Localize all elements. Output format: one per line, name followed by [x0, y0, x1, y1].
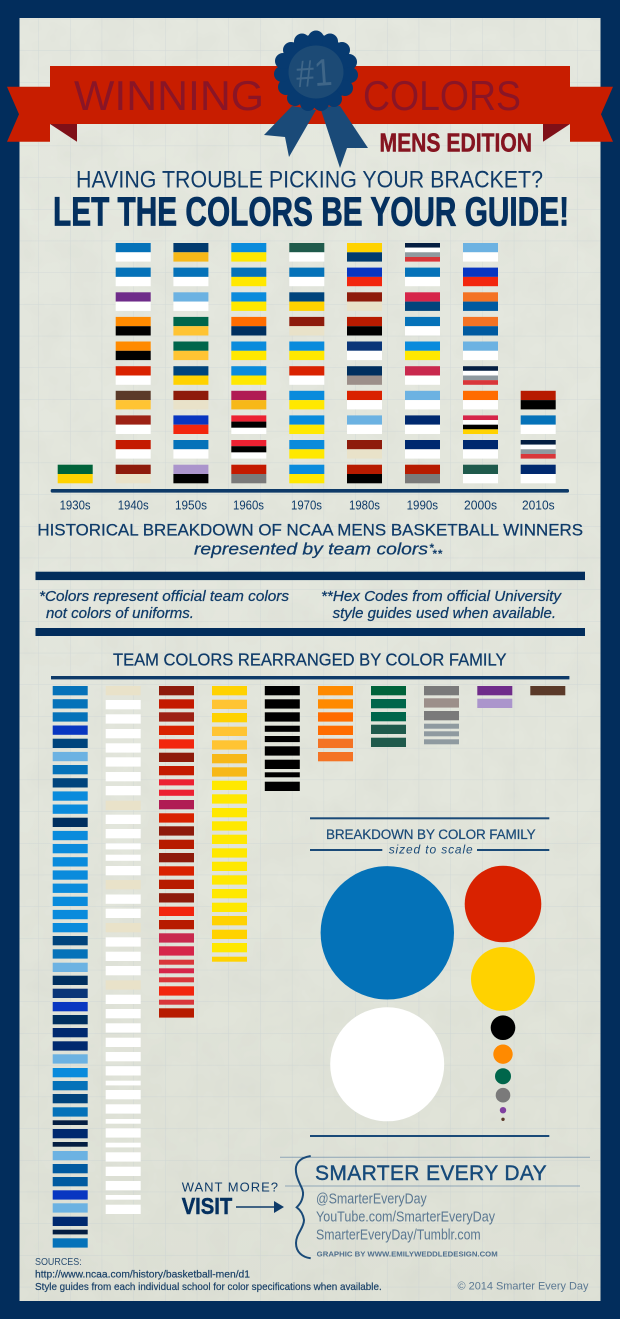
footnote: colors — [39, 589, 289, 622]
chart sub-caption: ** — [432, 547, 443, 561]
decade labels: 1930s — [60, 498, 91, 512]
family: greys — [424, 686, 459, 744]
decade 1980s — [347, 243, 382, 483]
family: greens — [371, 686, 406, 747]
decade 1970s — [289, 243, 324, 483]
sources: Style guides from each individual school for color specifications when available. — [35, 1281, 382, 1293]
number one: #1 — [295, 52, 334, 96]
decade labels — [60, 498, 555, 512]
footnote: colors: not colors of uniforms. — [46, 606, 194, 622]
chart sub-caption: represented by team colors — [194, 539, 429, 558]
word: winning: WINNING — [74, 72, 264, 119]
breakdown heading — [310, 817, 549, 856]
family section heading: TEAM COLORS REARRANGED BY COLOR FAMILY — [113, 650, 507, 670]
designer credit: GRAPHIC BY WWW.EMILYWEDDLEDESIGN.COM — [317, 1250, 498, 1259]
rosette tails — [264, 106, 368, 168]
call to action: VISIT — [182, 1193, 232, 1219]
family: reds — [159, 686, 194, 1018]
heading line one: HAVING TROUBLE PICKING YOUR BRACKET? — [76, 167, 543, 194]
decade labels: 1960s — [233, 498, 264, 512]
footnote: hex codes: **Hex Codes from official University — [321, 589, 562, 605]
decade 1960s — [231, 243, 266, 483]
left ribbon tail — [7, 87, 50, 142]
sources: http://www.ncaa.com/history/basketball-men/d1 — [35, 1268, 250, 1280]
proportional circles — [321, 866, 541, 1121]
decade labels: 1970s — [291, 498, 322, 512]
call to action: WANT MORE? — [182, 1180, 278, 1195]
circle: blue — [321, 866, 454, 1000]
family: whites — [106, 686, 141, 1214]
decade labels: 2010s — [522, 498, 555, 512]
contact links: YouTube.com/SmarterEveryDay — [316, 1210, 496, 1226]
decade 1990s — [405, 243, 440, 483]
family: purples — [477, 686, 512, 708]
subtitle: mens edition: MENS EDITION — [380, 128, 532, 158]
contact block — [315, 1162, 547, 1259]
sketch lines — [280, 1157, 590, 1186]
chart axis — [51, 489, 569, 493]
decade 1940s — [116, 243, 151, 483]
circle: orange — [493, 1044, 513, 1064]
family: browns — [530, 686, 565, 695]
decade 2000s — [463, 243, 498, 483]
family: blues — [53, 686, 88, 1248]
decade labels: 1940s — [118, 498, 149, 512]
family: blacks — [265, 686, 300, 791]
circle: purple — [500, 1107, 506, 1113]
divider bar top — [36, 572, 585, 580]
brand name: SMARTER EVERY DAY — [315, 1162, 547, 1185]
sources: SOURCES: — [35, 1256, 82, 1268]
circle: brown — [501, 1118, 505, 1121]
flag chart by decade — [58, 243, 556, 483]
footnote: hex codes — [321, 589, 562, 622]
breakdown closing rule — [310, 1135, 549, 1137]
circle: green — [495, 1068, 511, 1084]
circle: yellow — [471, 947, 535, 1011]
breakdown heading: BREAKDOWN BY COLOR FAMILY — [326, 827, 536, 842]
chart caption: HISTORICAL BREAKDOWN OF NCAA MENS BASKETBALL WINNERS — [37, 520, 583, 539]
family section rule — [51, 676, 569, 679]
contact links: SmarterEveryDay/Tumblr.com — [316, 1227, 481, 1243]
decade labels: 2000s — [464, 498, 497, 512]
call to action — [182, 1180, 284, 1219]
decade labels: 1950s — [175, 498, 207, 512]
chart sub-caption: * — [429, 541, 435, 555]
divider bar bottom — [36, 628, 585, 636]
circle: white — [330, 1007, 444, 1121]
footnote: hex codes: style guides used when available. — [333, 606, 556, 622]
rosette centre — [288, 46, 344, 98]
bars by color family — [53, 686, 565, 1248]
contact links — [316, 1191, 496, 1243]
word: colors: COLORS — [363, 72, 521, 119]
right ribbon tail — [543, 87, 613, 142]
breakdown heading: sized to scale — [389, 842, 473, 856]
rosette scallops — [274, 30, 358, 111]
sources — [35, 1256, 382, 1293]
curly brace — [296, 1156, 311, 1258]
ribbon band — [50, 66, 570, 124]
copyright: © 2014 Smarter Every Day — [458, 1280, 589, 1292]
circle: grey — [496, 1088, 510, 1102]
decade 1930s — [58, 465, 93, 483]
decade 2010s — [521, 391, 556, 483]
decade labels: 1980s — [349, 498, 380, 512]
rosette badge — [264, 30, 368, 168]
circle: black — [491, 1015, 515, 1040]
header ribbon — [7, 66, 613, 142]
decade 1950s — [173, 243, 208, 483]
family: yellows — [212, 686, 247, 962]
contact links: @SmarterEveryDay — [316, 1191, 427, 1207]
circle: red — [465, 866, 541, 942]
family: oranges — [318, 686, 353, 761]
ribbon folds — [50, 124, 570, 142]
arrow — [236, 1201, 284, 1213]
decade labels: 1990s — [407, 498, 438, 512]
footnote: colors: *Colors represent official team colors — [39, 589, 289, 605]
